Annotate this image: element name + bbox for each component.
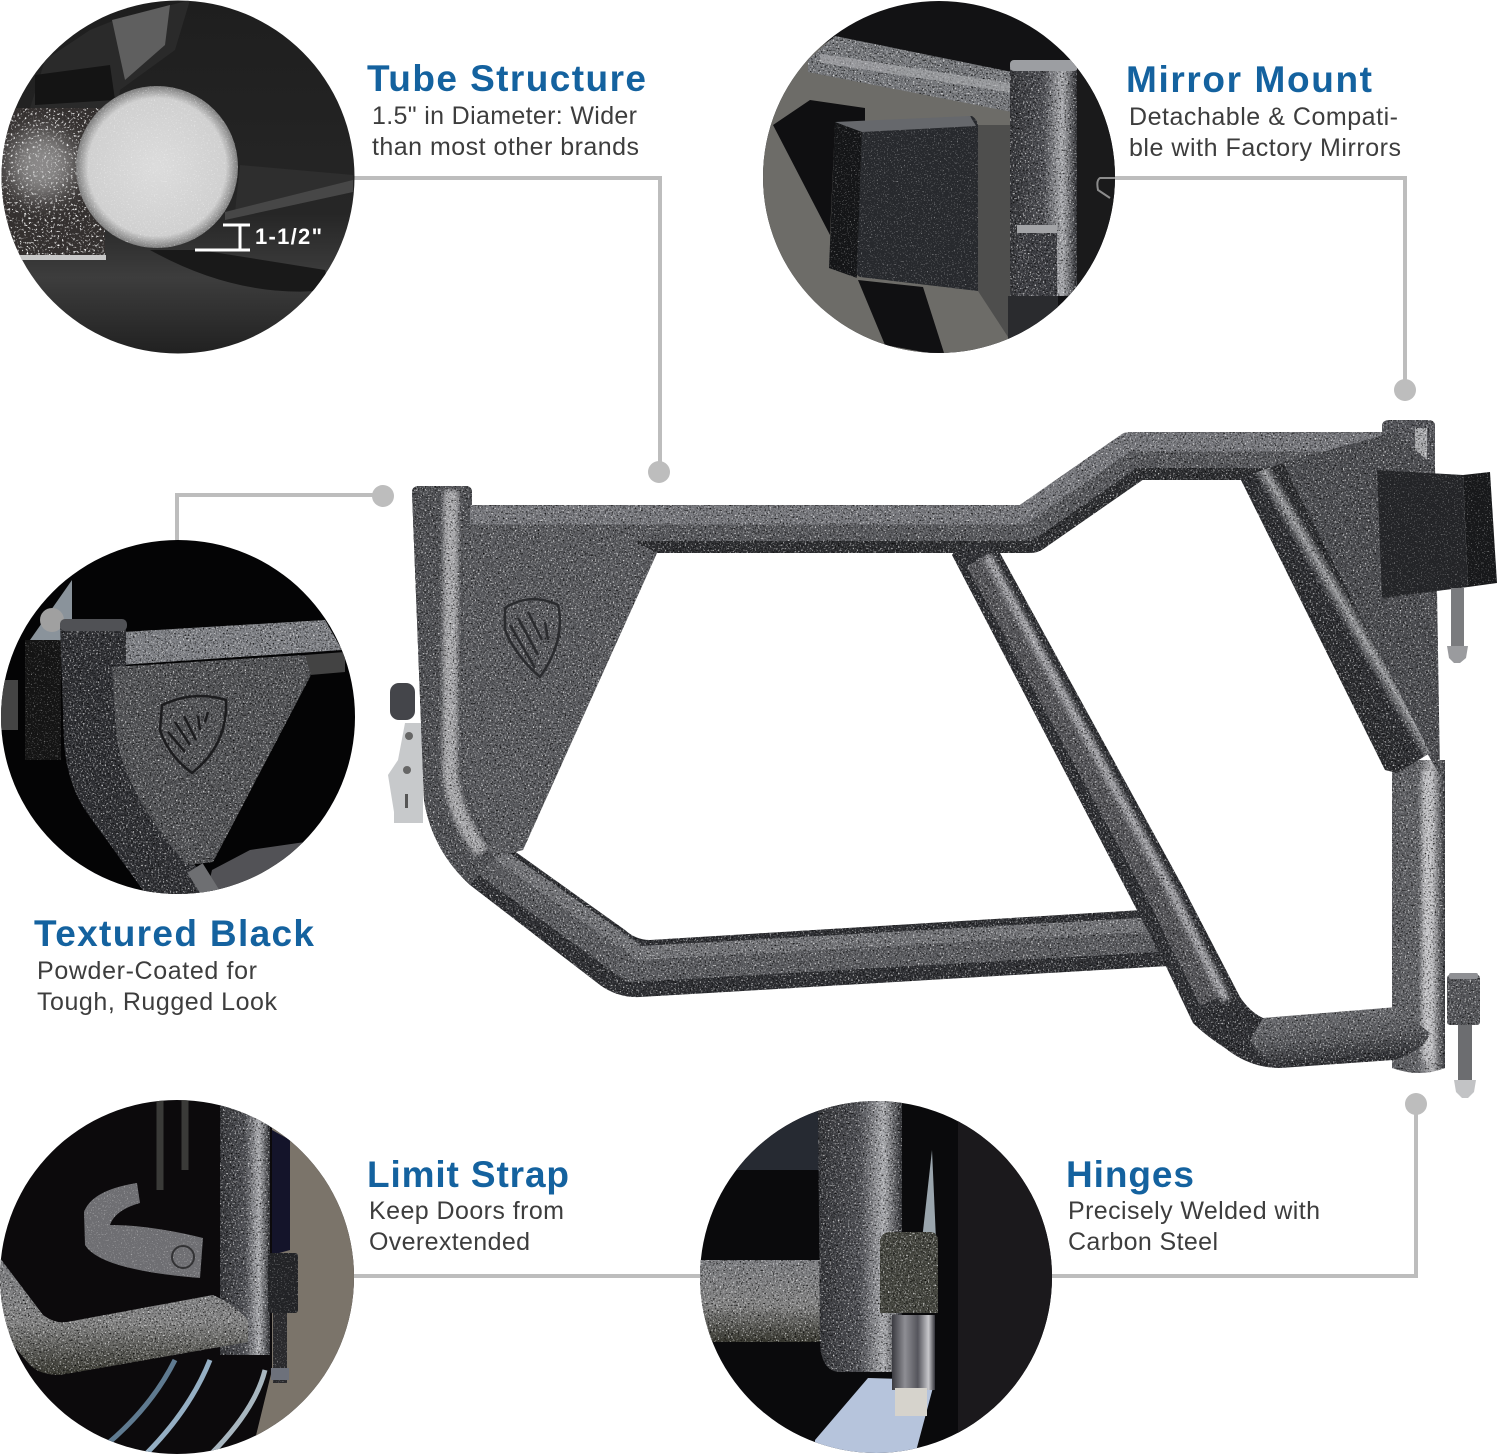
right lower vertical tube [1392,760,1445,1073]
connector: mirror mount [1115,178,1416,401]
connector: limit strap [354,1274,701,1278]
hinge sleeve [268,1253,298,1313]
far side detail [1077,68,1115,286]
top tube [808,36,1012,112]
right gusset plate [1283,432,1440,775]
gusset [112,655,311,865]
lower shadow [858,280,945,356]
frame tubes [412,420,1445,1073]
left hinge [0,580,72,760]
description: Precisely Welded with [1068,1197,1320,1225]
dimension mark [195,225,250,250]
description [37,957,278,1016]
heading: Textured Black [34,913,314,954]
lower hinge pin [1454,1025,1476,1098]
photo circle: tube structure [0,0,356,356]
photo circle: hinges [695,1095,1060,1455]
hinge sleeve [1017,225,1057,298]
photo circle: textured black [0,535,360,900]
dimension label: 1-1/2" [255,224,322,249]
description: 1.5" in Diameter: Wider [372,102,637,130]
heading: Hinges [1066,1154,1194,1195]
callout: tube structure [367,58,646,161]
cut tube end disc [76,86,238,248]
door plate [760,40,1012,360]
description: than most other brands [372,133,639,161]
description: Overextended [369,1228,530,1256]
photo circle: limit strap [0,1095,362,1455]
vertical tube [220,1095,270,1355]
main curved tube [412,486,1185,997]
pin nut [895,1388,927,1416]
glass sliver [922,1150,936,1240]
callout: mirror mount [1126,59,1401,162]
mirror block front [856,116,978,291]
description [369,1197,564,1256]
logo shield [505,599,560,677]
bent lower tube [0,1258,248,1375]
connector: tube structure [353,178,670,483]
hinge pin [273,1313,287,1383]
hinge pin [892,1315,935,1390]
tube highlight [8,131,76,199]
connector: hinges [1052,1093,1427,1276]
callout: limit strap [367,1154,569,1256]
window cutout [773,100,865,235]
wheel arcs [100,1360,265,1455]
background rods [160,1100,185,1190]
description [1068,1197,1320,1256]
photo circle: mirror mount [760,0,1127,360]
window frame [700,1110,820,1170]
description: ble with Factory Mirrors [1129,134,1401,162]
door frame product [388,420,1497,1098]
block shadow [978,125,1010,340]
mirror block side [829,122,862,278]
rear tube stub [305,652,345,675]
vertical tube [818,1095,902,1372]
logo shield [160,696,226,773]
mirror block top [835,116,976,132]
back panel [250,1095,362,1455]
lower hinge sleeve [1447,973,1480,1025]
description: Carbon Steel [1068,1228,1218,1256]
seat [207,842,304,892]
mirror reflection [815,1378,935,1455]
tube side [0,108,105,255]
tube cap [1010,60,1078,71]
mirror block front [1377,470,1468,598]
lower right tube [1250,1007,1430,1068]
heading: Tube Structure [367,58,646,99]
background garage detail [30,0,353,292]
callout: textured black [34,913,314,1016]
right door panel [958,1095,1058,1455]
horizontal tube [695,1260,830,1342]
bracket glint [1097,178,1116,198]
tube cap [60,619,127,631]
pin below [1008,296,1058,339]
pin nut [271,1368,289,1380]
heading: Limit Strap [367,1154,569,1195]
lower tube highlight [195,868,215,900]
left gusset plate [463,528,657,857]
connector: textured black [177,485,394,541]
mirror pin [1447,588,1468,663]
description: Powder-Coated for [37,957,257,985]
hinge sleeve [880,1232,938,1313]
vertical tube [1010,62,1077,296]
center diagonal tube [952,543,1300,1068]
right top post [1382,420,1435,470]
upper tube [470,442,1420,529]
description [1129,103,1401,162]
description: Tough, Rugged Look [37,988,278,1016]
right diagonal tube [1240,463,1430,773]
limit strap [84,1183,203,1278]
mirror block side [1463,472,1497,587]
top tube [120,620,342,665]
left hinge bracket [388,683,423,823]
callout: hinges [1066,1154,1320,1256]
bent tube [60,620,225,900]
tube underside line [20,255,106,260]
description [372,102,639,161]
heading: Mirror Mount [1126,59,1372,100]
description: Detachable & Compati- [1129,103,1398,131]
description: Keep Doors from [369,1197,564,1225]
